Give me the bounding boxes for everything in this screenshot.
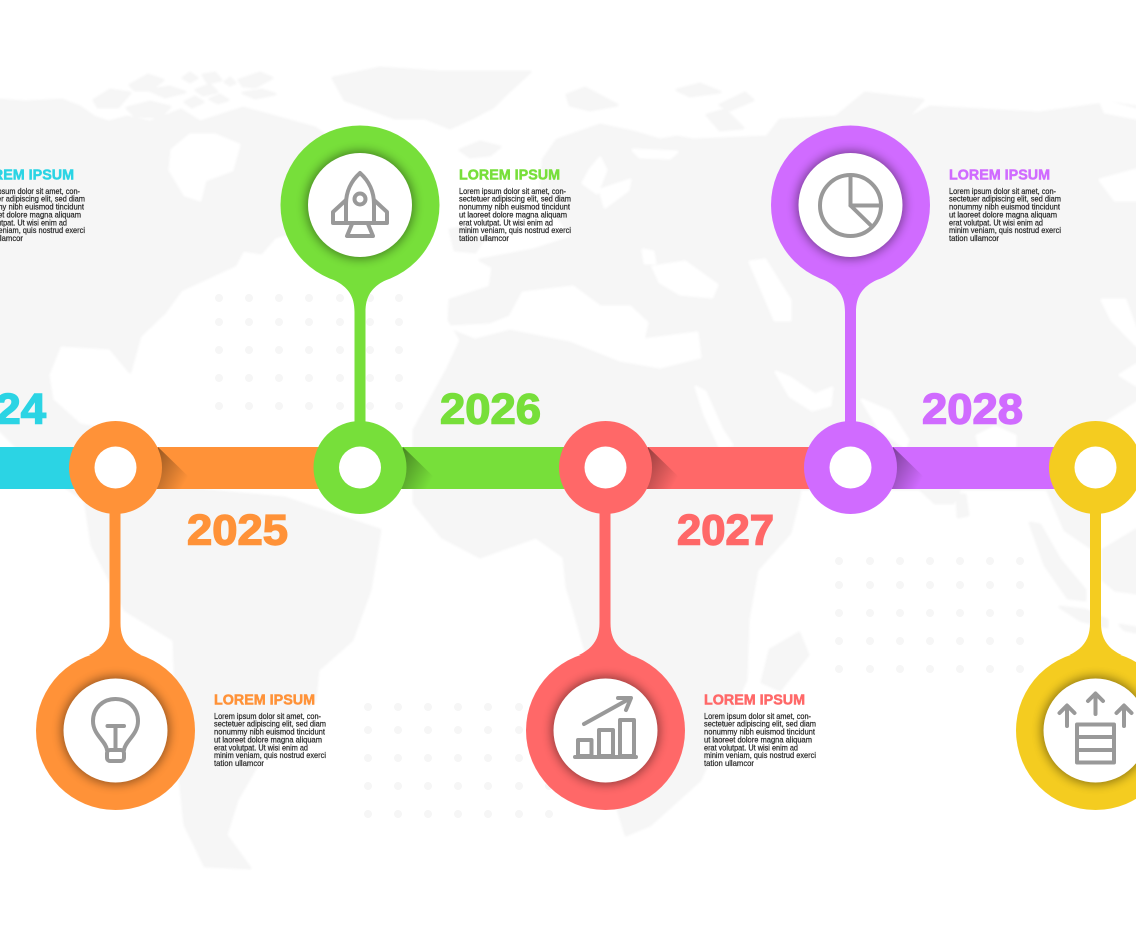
body text (459, 187, 571, 243)
node hole (830, 446, 872, 488)
node hole (1074, 446, 1116, 488)
body text: nonummy nibh euismod tincidunt (704, 728, 816, 736)
body text: nonummy nibh euismod tincidunt (214, 728, 326, 736)
body text (949, 187, 1061, 243)
heading: LOREM IPSUM (214, 692, 315, 708)
year 2028: 2028 (922, 386, 1023, 434)
year 2027: 2027 (677, 506, 774, 554)
milestone 2028 (771, 126, 1061, 514)
body text: erat volutpat. Ut wisi enim ad (949, 218, 1043, 227)
node hole (94, 446, 136, 488)
icon: growth chart (575, 698, 636, 757)
body text: sectetuer adipiscing elit, sed diam (459, 195, 571, 204)
body text: nonummy nibh euismod tincidunt (459, 202, 571, 212)
body text: Lorem ipsum dolor sit amet, con- (214, 712, 321, 721)
inner shadow (796, 151, 904, 259)
body text: erat volutpat. Ut wisi enim ad (704, 743, 798, 752)
body text: tation ullamcor (214, 759, 264, 768)
milestone 2024 text (cropped) (0, 167, 85, 434)
inner shadow (552, 676, 660, 784)
milestone 2027 (526, 421, 816, 810)
purple pin (771, 126, 930, 514)
node hole (584, 446, 626, 488)
timeline bar (0, 447, 1095, 489)
year 2025: 2025 (187, 506, 288, 554)
body text (704, 712, 816, 768)
white disc (798, 153, 902, 257)
green pin (280, 126, 440, 514)
white disc (64, 678, 168, 782)
milestone 2029 (cropped yellow pin) (1016, 421, 1136, 810)
inner shadow (1042, 676, 1136, 784)
body text: tation ullamcor (949, 234, 999, 243)
milestone 2025 (36, 421, 326, 810)
dot grid: lower centre (364, 703, 553, 818)
dot grid: lower right (835, 557, 1024, 673)
body text: Lorem ipsum dolor sit amet, con- (704, 712, 811, 721)
icon: pie chart (820, 175, 881, 236)
year 2026: 2026 (440, 386, 541, 434)
orange pin (36, 421, 195, 810)
body text: erat volutpat. Ut wisi enim ad (214, 743, 308, 752)
body text: ut laoreet dolore magna aliquam (949, 210, 1057, 219)
body text: minim veniam, quis nostrud exerci (459, 226, 571, 235)
body text: ut laoreet dolore magna aliquam (214, 735, 322, 744)
body text: tation ullamcor (704, 759, 754, 768)
icon: light bulb (93, 699, 138, 761)
body text: Lorem ipsum dolor sit amet, con- (949, 187, 1056, 196)
body text: sectetuer adipiscing elit, sed diam (949, 195, 1061, 204)
heading: LOREM IPSUM (704, 692, 805, 708)
yellow pin (1016, 421, 1136, 810)
white seas over the land (170, 100, 1136, 447)
body text: minim veniam, quis nostrud exerci (214, 751, 326, 760)
body text: Lorem ipsum dolor sit amet, con- (459, 187, 566, 196)
heading: LOREM IPSUM (459, 167, 560, 183)
body text: sectetuer adipiscing elit, sed diam (214, 720, 326, 729)
white disc (554, 678, 658, 782)
heading: LOREM IPSUM (949, 167, 1050, 183)
body text: ut laoreet dolore magna aliquam (704, 735, 812, 744)
body text (0, 187, 85, 243)
white disc (1044, 678, 1136, 782)
body text: tation ullamcor (459, 234, 509, 243)
body text: nonummy nibh euismod tincidunt (949, 202, 1061, 212)
white disc (308, 153, 412, 257)
red pin (526, 421, 685, 810)
icon: box with arrows (1060, 694, 1132, 762)
inner shadow (62, 676, 170, 784)
dot grid: upper left (215, 294, 403, 410)
body text: ut laoreet dolore magna aliquam (459, 210, 567, 219)
body text (214, 712, 326, 768)
body text: sectetuer adipiscing elit, sed diam (704, 720, 816, 729)
body text: erat volutpat. Ut wisi enim ad (459, 218, 553, 227)
icon: rocket (333, 173, 387, 236)
inner shadow (306, 151, 414, 259)
body text: minim veniam, quis nostrud exerci (704, 751, 816, 760)
node hole (339, 446, 381, 488)
body text: minim veniam, quis nostrud exerci (949, 226, 1061, 235)
milestone 2026 (280, 126, 571, 514)
